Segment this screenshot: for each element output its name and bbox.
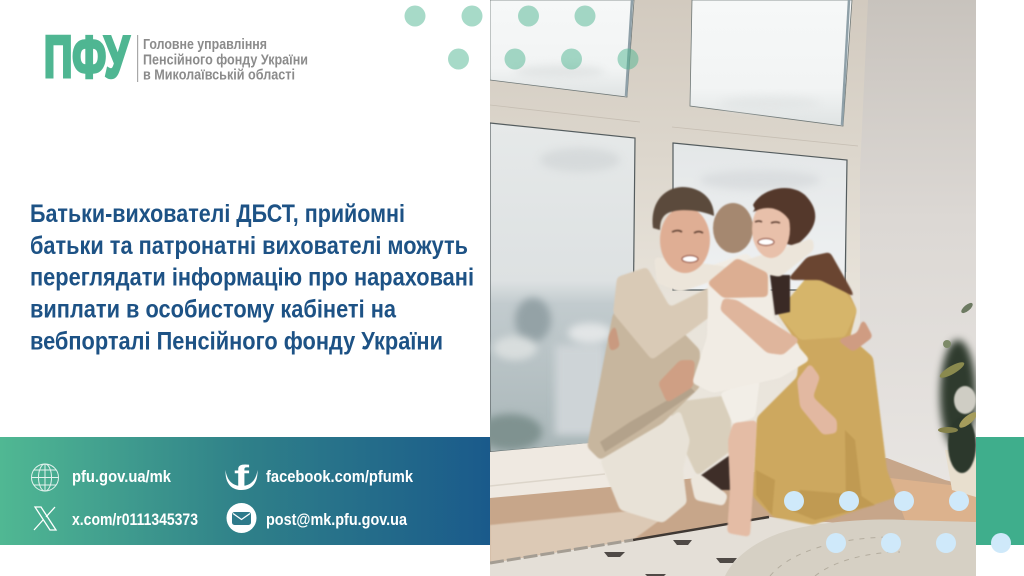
toddler's hair: [713, 203, 753, 253]
icon: facebook: [225, 460, 258, 493]
second child's leg: [797, 363, 837, 435]
tile border: [633, 517, 769, 540]
letter f: f: [234, 460, 250, 493]
woman's hair fringe: [753, 196, 792, 225]
window frame: [490, 0, 868, 500]
logo: ПФУ regional office: [44, 25, 308, 90]
glass edge strips: [626, 0, 849, 272]
sunlit cream floor: [490, 510, 660, 563]
icon: X: [34, 507, 56, 530]
website link: pfu.gov.ua/mk: [72, 467, 171, 486]
X link: x.com/r0111345373: [72, 510, 198, 529]
child's leggings: [721, 384, 758, 422]
logo caption: [143, 37, 308, 84]
man's far hand: [608, 328, 620, 350]
lower right pane: [673, 143, 847, 290]
man's eyes: [672, 230, 703, 233]
heading: [30, 200, 474, 356]
heading: переглядати інформацію про нараховані: [30, 264, 474, 292]
man's hand on child: [707, 258, 768, 298]
rug rings: [770, 537, 900, 576]
man's thigh: [667, 395, 732, 476]
rug: [725, 519, 976, 576]
tile floor: [490, 517, 860, 576]
heading: вебпорталі Пенсійного фонду України: [30, 328, 443, 356]
second child's hair: [787, 252, 857, 300]
icon: mail: [226, 503, 256, 533]
lower left pane: [490, 123, 635, 452]
child's leg: [727, 420, 757, 537]
logo caption: Пенсійного фонду України: [143, 52, 308, 68]
logo divider: [137, 35, 138, 82]
heading: Батьки-вихователі ДБСТ, прийомні: [30, 200, 405, 228]
woman's eyes: [755, 221, 780, 223]
dark gap: man's leg: [697, 455, 730, 490]
email link: post@mk.pfu.gov.ua: [266, 510, 407, 529]
sill edge: [490, 474, 605, 486]
envelope flap: [233, 514, 250, 520]
right green block: [976, 437, 1024, 545]
tile border light: [490, 540, 633, 563]
decorative dots: green: [404, 6, 638, 70]
plant pot: [945, 450, 976, 497]
dark gap: [770, 275, 790, 315]
man's shirt body: [587, 300, 700, 460]
man's sleeve: [613, 268, 709, 358]
upper right pane: [690, 0, 852, 126]
sunlit floor: [890, 478, 976, 522]
woman's hand: [837, 318, 873, 352]
tile diamonds: [604, 540, 737, 576]
logo caption: в Миколаївській області: [143, 68, 295, 84]
woman's dress: [753, 267, 897, 525]
icon: globe: [32, 464, 58, 491]
heading: виплати в особистому кабінеті на: [30, 296, 397, 324]
window sill: [490, 443, 589, 456]
man's sock: [690, 474, 728, 506]
decorative dots: light blue: [784, 491, 1011, 553]
envelope: [232, 512, 251, 525]
mail disc: [226, 503, 256, 533]
man's hair: [653, 187, 714, 230]
wood floor: [490, 458, 974, 562]
man's trousers: [600, 410, 690, 523]
logo mark: ПФУ: [44, 25, 130, 90]
man's lower hand: [658, 360, 695, 403]
upper left pane: [490, 0, 634, 97]
dress folds: [756, 430, 875, 520]
shirt shadow: [600, 387, 695, 452]
child's white dress: [692, 253, 810, 393]
plant leaves: [938, 301, 979, 473]
heading: батьки та патронатні вихователі можуть: [30, 232, 468, 260]
facebook link: facebook.com/pfumk: [266, 467, 413, 486]
man's smile: [682, 256, 698, 262]
man's face: [660, 207, 710, 273]
photo: family hugging by the window: [478, 0, 979, 576]
dress sleeve: [780, 280, 856, 340]
crescent: [225, 470, 258, 490]
scarf arm: [654, 238, 814, 292]
woman's smile: [758, 238, 774, 246]
wall: [850, 0, 976, 490]
sash lines: [490, 105, 858, 146]
woman's hair: [753, 188, 815, 246]
man's neck: [665, 250, 705, 280]
woman's face: [752, 200, 790, 258]
contact band: [0, 437, 490, 545]
clouds and city view: [478, 65, 820, 450]
logo caption: Головне управління: [143, 37, 267, 53]
woman's arm: [720, 298, 800, 355]
